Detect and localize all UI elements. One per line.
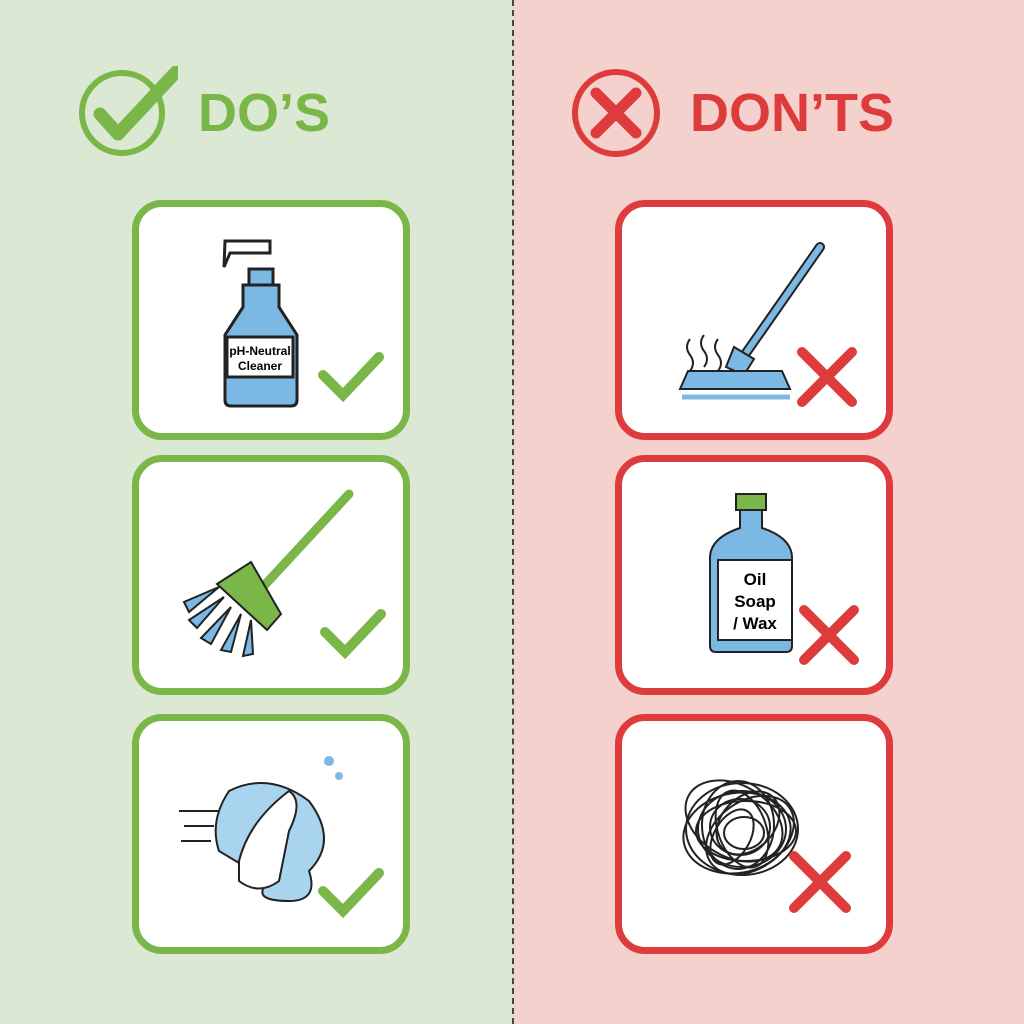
icon: steel wool — [671, 764, 809, 890]
icon: check — [325, 614, 381, 652]
heading: don'ts: DON’TS — [690, 83, 894, 143]
panel: spray cleaner: Cleaner — [238, 359, 282, 373]
icon: check — [323, 357, 379, 395]
panel: steel wool — [615, 714, 893, 954]
icon: steam mop — [680, 247, 820, 397]
icon: x — [794, 856, 846, 908]
icon: x — [802, 352, 852, 402]
icon: bottle — [736, 494, 766, 510]
icon: spray bottle — [224, 241, 297, 406]
panel: oil soap wax: Soap — [734, 592, 776, 611]
panel: oil soap wax: Oil — [744, 570, 766, 589]
heading: do's: DO’S — [198, 83, 330, 143]
icon: check — [323, 873, 379, 911]
icon: hand with cloth — [216, 783, 324, 901]
panel: oil soap wax — [615, 455, 893, 695]
icon: x circle — [572, 69, 660, 157]
icon: mop — [249, 494, 349, 602]
panel: steam mop — [615, 200, 893, 440]
panel: wipe spills — [132, 714, 410, 954]
panel: spray cleaner — [132, 200, 410, 440]
panel: oil soap wax: / Wax — [733, 614, 777, 633]
icon: check circle — [79, 66, 178, 156]
icon: x — [804, 610, 854, 660]
panel: spray cleaner: pH-Neutral — [229, 344, 291, 358]
header: don'ts — [572, 69, 894, 157]
panel: microfiber mop — [132, 455, 410, 695]
header: do's — [79, 66, 330, 156]
